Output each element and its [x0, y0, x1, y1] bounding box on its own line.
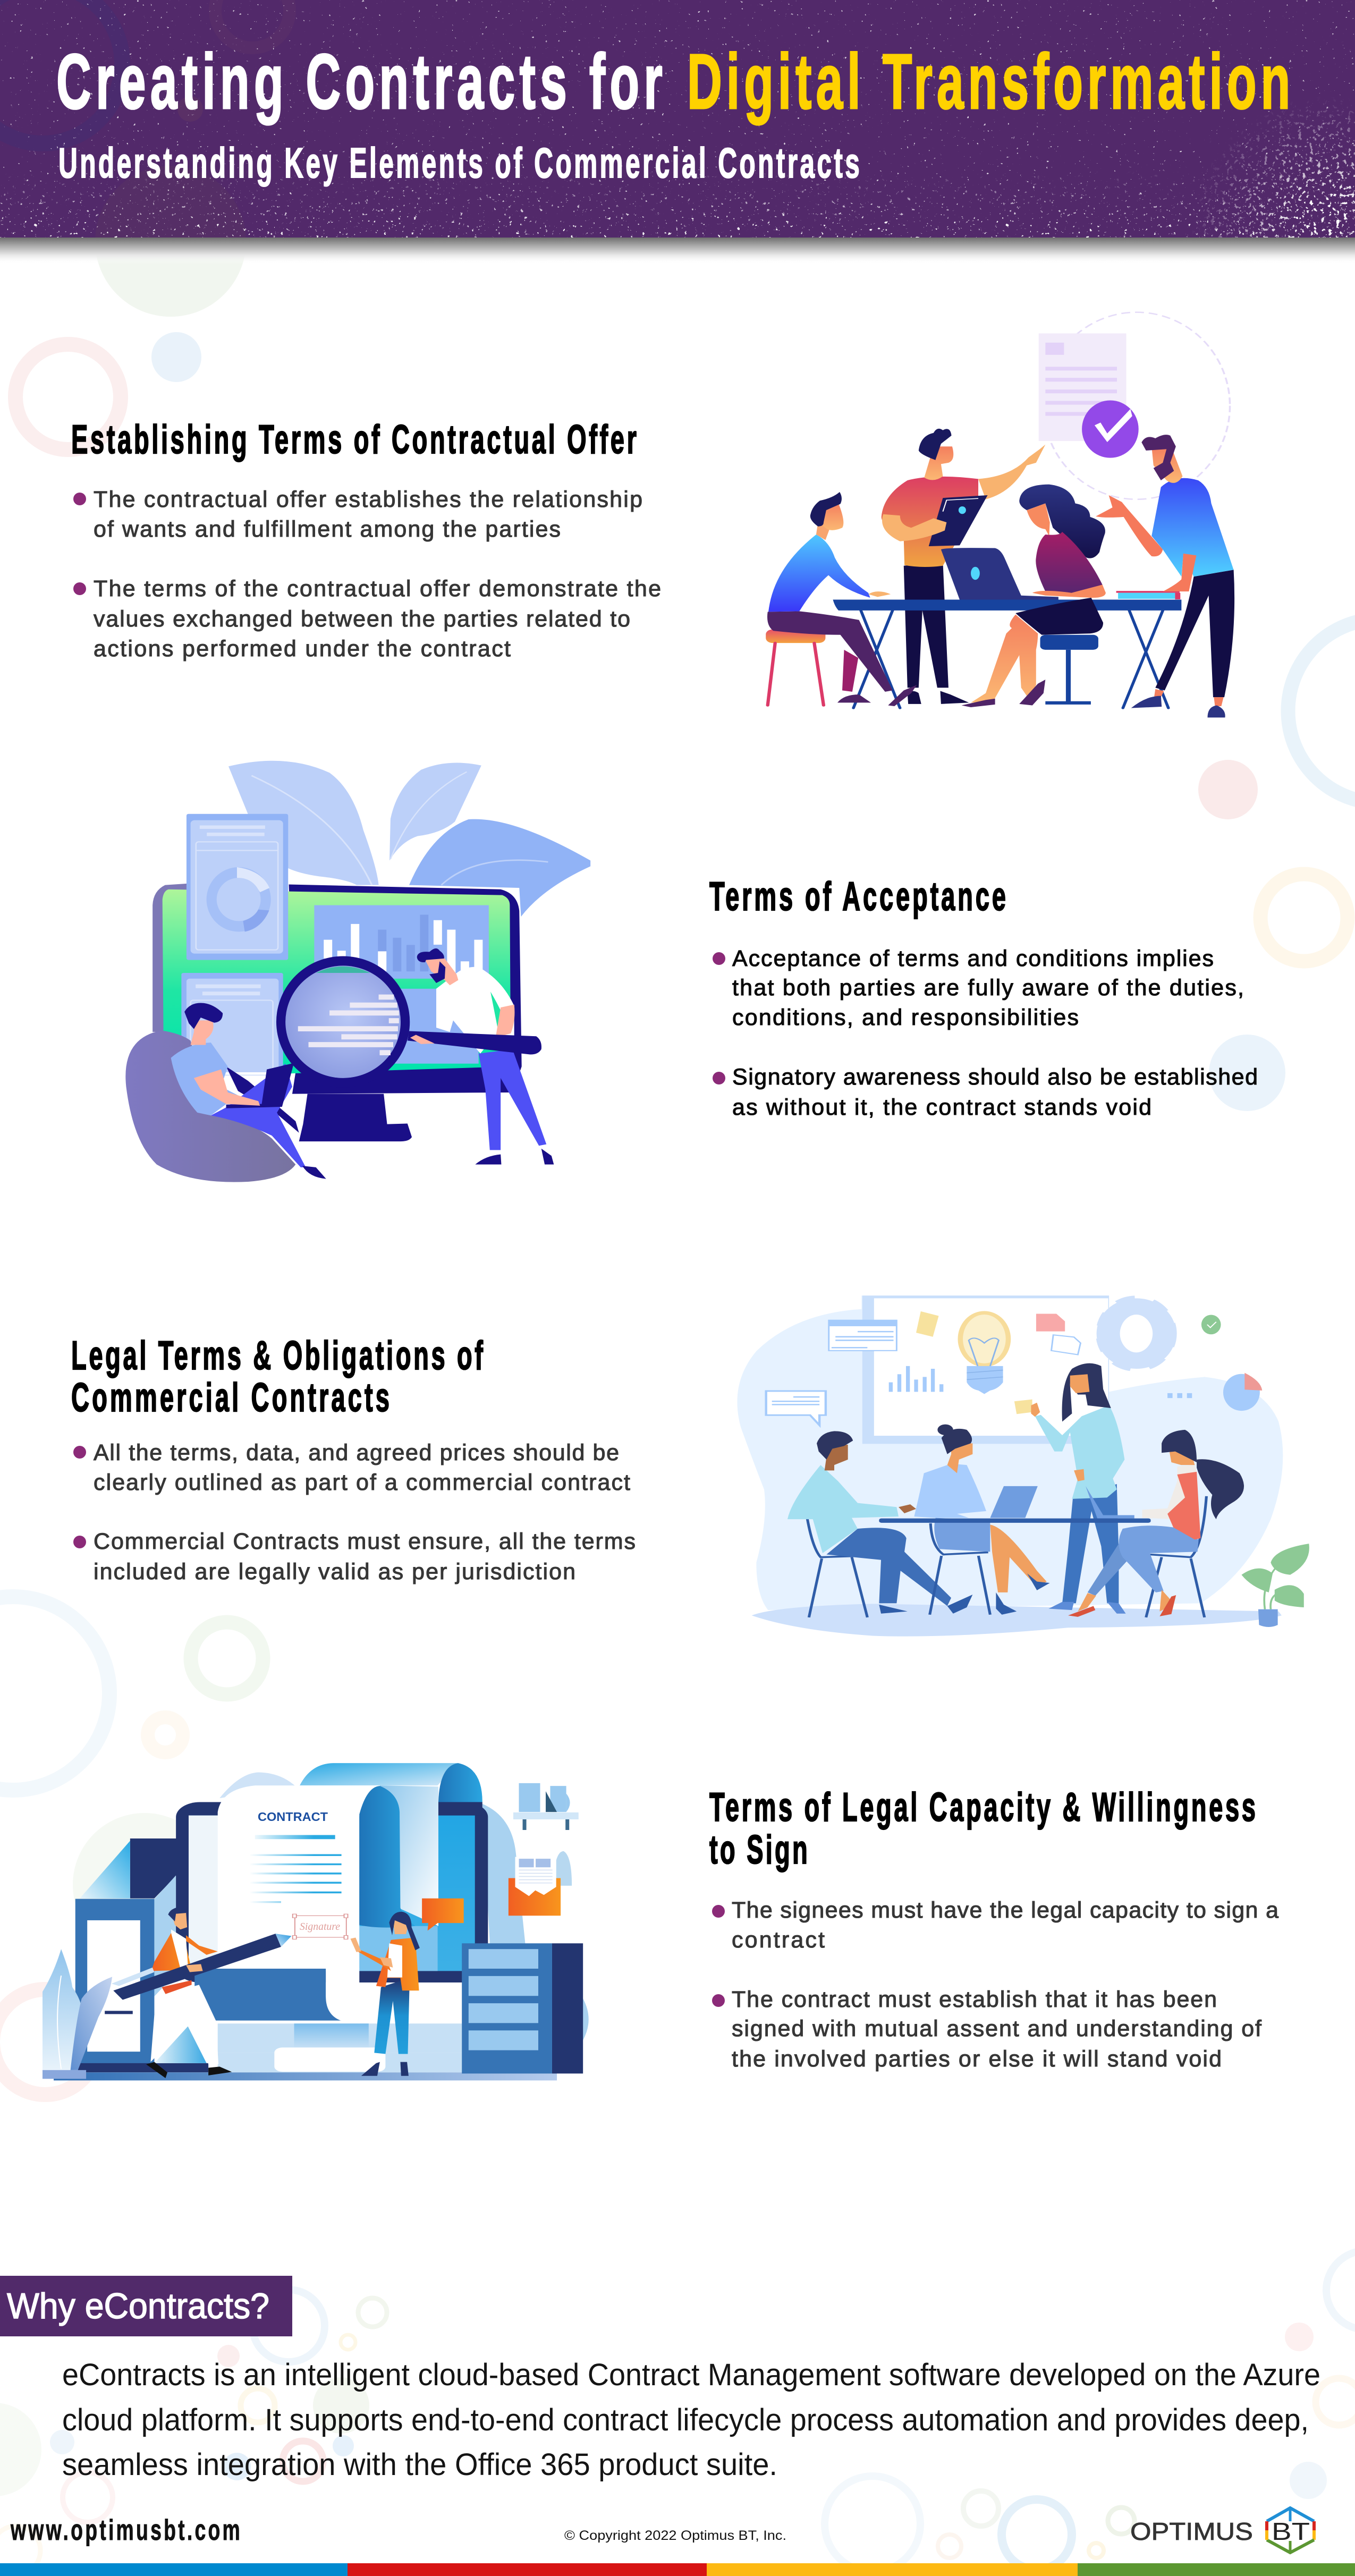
copyright: © Copyright 2022 Optimus BT, Inc.: [564, 2528, 786, 2543]
section 1: establishing terms of contractual offer: [71, 418, 661, 662]
background blob: [737, 1295, 1283, 1610]
bullet 2: signed with mutual assent and understanding of: [732, 2016, 1262, 2041]
header shadow: [0, 238, 1355, 264]
bullet 1: conditions, and responsibilities: [732, 1005, 1079, 1030]
bullet 2: [712, 1987, 1262, 2072]
section 3: legal terms and obligations: [71, 1334, 636, 1584]
heading: Terms of Legal Capacity & Willingness: [709, 1785, 1256, 1830]
bullet 1: Acceptance of terms and conditions implies: [732, 946, 1214, 971]
illustration: team meeting with approved document: [766, 312, 1234, 717]
person: seated man left: [766, 492, 917, 706]
icon: browser window: [829, 1320, 896, 1351]
person: standing man with magnifier: [417, 948, 554, 1164]
person: seated woman: [961, 485, 1106, 707]
footer colour bar: [0, 2563, 1355, 2576]
why econtracts label: Why eContracts?: [7, 2286, 269, 2326]
bullet 2: Commercial Contracts must ensure, all the terms: [94, 1529, 636, 1554]
illustration: analyst with magnifier and monitor: [125, 761, 590, 1182]
heading: Terms of Acceptance: [709, 875, 1006, 919]
bullet 1: The contractual offer establishes the relationship: [94, 487, 642, 512]
optimus bt logo: BT: [1272, 2518, 1310, 2545]
icon: check badge: [1082, 400, 1139, 458]
bullet 2: the involved parties or else it will stand void: [732, 2046, 1222, 2072]
table legs: [853, 611, 1168, 708]
title: Digital Transformation: [687, 38, 1290, 125]
why econtracts label: [0, 2276, 292, 2336]
leaves: [228, 761, 590, 917]
icon: potted plant: [1241, 1544, 1309, 1627]
background shapes: [219, 1773, 589, 2040]
icon: check: [1201, 1315, 1221, 1334]
sticky notes and bars: [889, 1311, 1081, 1392]
dashed circle: [1044, 312, 1230, 499]
signature text: Signature: [300, 1921, 340, 1933]
bullet 2: The terms of the contractual offer demonstrate the: [94, 576, 661, 601]
panel: donut chart tablet: [187, 814, 288, 960]
monitor: [176, 1802, 488, 2072]
contract scroll title: CONTRACT: [258, 1810, 328, 1824]
header banner: [0, 0, 1355, 238]
section 2: terms of acceptance: [709, 875, 1258, 1120]
bullet 1: [73, 487, 642, 542]
monitor: [153, 884, 522, 1141]
heading: [71, 1334, 484, 1420]
icon: speech bubble: [766, 1391, 826, 1425]
bullet 2: [73, 1529, 636, 1584]
person: woman with ponytail: [1068, 1430, 1244, 1617]
speech bubble: [422, 1899, 464, 1930]
icon: magnifying glass: [276, 956, 541, 1088]
econtracts description: cloud platform. It supports end-to-end contract lifecycle process automation and provides deep,: [62, 2403, 1309, 2437]
person: man left: [787, 1431, 972, 1617]
heading: [709, 1785, 1256, 1872]
whiteboard: [862, 1295, 1109, 1444]
heading: Establishing Terms of Contractual Offer: [71, 418, 637, 462]
bullet 2: The contract must establish that it has been: [732, 1987, 1217, 2012]
table top: [833, 599, 1181, 611]
econtracts description: eContracts is an intelligent cloud-based Contract Management software developed on the Azure: [62, 2358, 1320, 2392]
panel: lower left: [181, 973, 283, 1075]
bullet 1: [712, 1897, 1278, 1953]
floor bar: [54, 2072, 557, 2080]
bullet 1: that both parties are fully aware of the duties,: [732, 975, 1244, 1001]
bullet 2: [713, 1064, 1258, 1120]
subtitle: Understanding Key Elements of Commercial Contracts: [58, 140, 860, 187]
website url: www.optimusbt.com: [10, 2513, 240, 2546]
optimus bt logo: OPTIMUS: [1130, 2518, 1253, 2545]
bullet 2: included are legally valid as per jurisdiction: [94, 1559, 575, 1584]
floor shadow: [752, 1604, 1282, 1637]
illustration: signing a digital contract: [43, 1763, 589, 2080]
person: seated man with laptop: [171, 1003, 326, 1179]
econtracts description: seamless integration with the Office 365 product suite.: [62, 2447, 777, 2482]
icon: gear: [1100, 1299, 1172, 1368]
bullet 1: [73, 1440, 630, 1495]
bullet 1: clearly outlined as part of a commercial contract: [94, 1470, 630, 1495]
icon: envelope with letter: [509, 1851, 572, 1916]
filing cabinet: [462, 1943, 583, 2073]
bullet 1: contract: [732, 1927, 825, 1953]
icon: pie chart: [1167, 1373, 1262, 1411]
heading: Legal Terms & Obligations of: [71, 1334, 484, 1378]
bullet 2: [73, 576, 661, 662]
person: standing bearded man: [1096, 435, 1234, 717]
bullet 1: All the terms, data, and agreed prices should be: [94, 1440, 619, 1465]
signature box: [293, 1914, 348, 1939]
bullet 2: Signatory awareness should also be established: [732, 1064, 1258, 1090]
person: standing woman: [1014, 1363, 1126, 1614]
title: Creating Contracts for: [56, 38, 663, 125]
illustration: brainstorming team at table: [737, 1295, 1309, 1637]
document: [1039, 333, 1127, 441]
bullet 2: values exchanged between the parties related to: [94, 606, 630, 632]
table and laptops: [879, 1486, 1151, 1523]
econtracts description: [62, 2358, 1320, 2482]
bullet 1: [713, 946, 1244, 1030]
section 4: terms of legal capacity and willingness to sign: [709, 1785, 1278, 2072]
bean bag: [125, 1030, 295, 1182]
panel: lower right: [394, 989, 479, 1064]
optimus bt logo: [1130, 2508, 1314, 2553]
person: woman at laptop: [914, 1425, 1050, 1615]
contract scroll: [194, 1763, 482, 2023]
building on left: [75, 1838, 208, 2072]
bullet 1: The signees must have the legal capacity to sign a: [732, 1897, 1278, 1923]
bullet 1: of wants and fulfillment among the parties: [94, 516, 561, 542]
heading: to Sign: [709, 1828, 808, 1872]
icon: light bulb: [958, 1311, 1011, 1394]
title: [56, 38, 1290, 125]
laptop: [941, 548, 1058, 599]
bullet 2: actions performed under the contract: [94, 636, 511, 662]
bullet 2: as without it, the contract stands void: [732, 1095, 1151, 1120]
bookshelf: [513, 1783, 579, 1830]
person: man with pencil: [112, 1906, 292, 2078]
person: woman with jacket: [350, 1912, 420, 2076]
bar chart panel: [314, 905, 489, 979]
books: [1116, 591, 1180, 599]
heading: Commercial Contracts: [71, 1376, 389, 1420]
person: standing man with tablet: [882, 429, 1045, 704]
plant: [43, 1949, 112, 2079]
